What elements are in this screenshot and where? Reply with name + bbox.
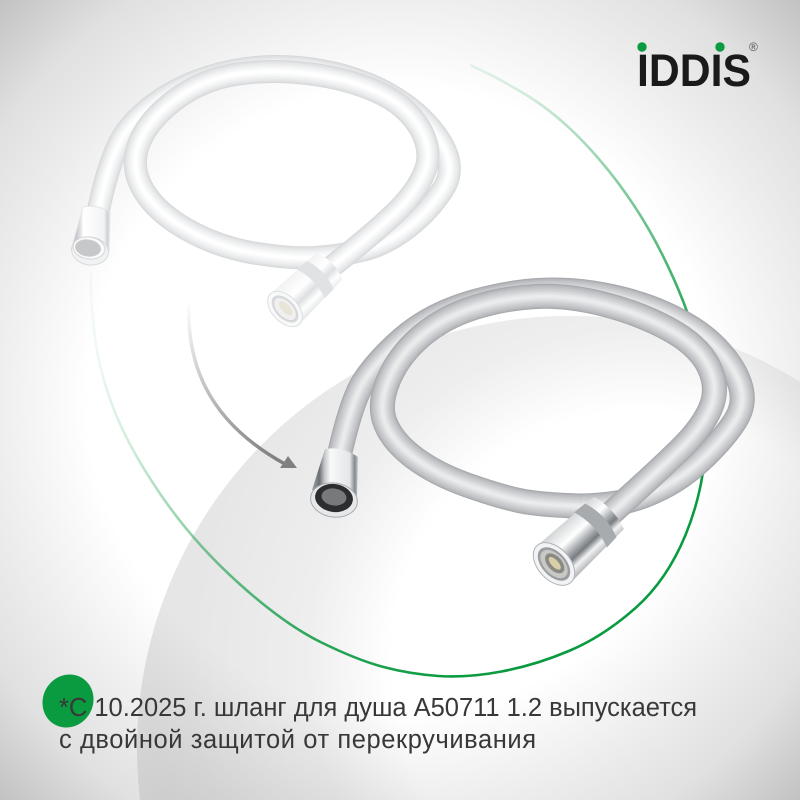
- connector: white hose, cap end: [70, 206, 110, 267]
- connector: silver hose, threaded end: [525, 492, 628, 593]
- connector: white hose, threaded end: [261, 248, 347, 333]
- background circle: [137, 316, 800, 800]
- green dot accent: [33, 665, 103, 737]
- arrow: before to after: [189, 300, 297, 468]
- hose: silver (after): [340, 290, 742, 518]
- logo: IDDIS: IDDIS: [637, 45, 751, 96]
- footnote text: [59, 694, 697, 754]
- footnote text: с двойной защитой от перекручивания: [59, 726, 536, 754]
- logo: IDDIS: ®: [749, 40, 758, 54]
- green ellipse outline: [91, 65, 706, 676]
- connector: silver hose, cap end: [308, 448, 360, 520]
- hose: white (before): [98, 66, 449, 268]
- footnote text: *С 10.2025 г. шланг для душа А50711 1.2 выпускается: [59, 694, 697, 722]
